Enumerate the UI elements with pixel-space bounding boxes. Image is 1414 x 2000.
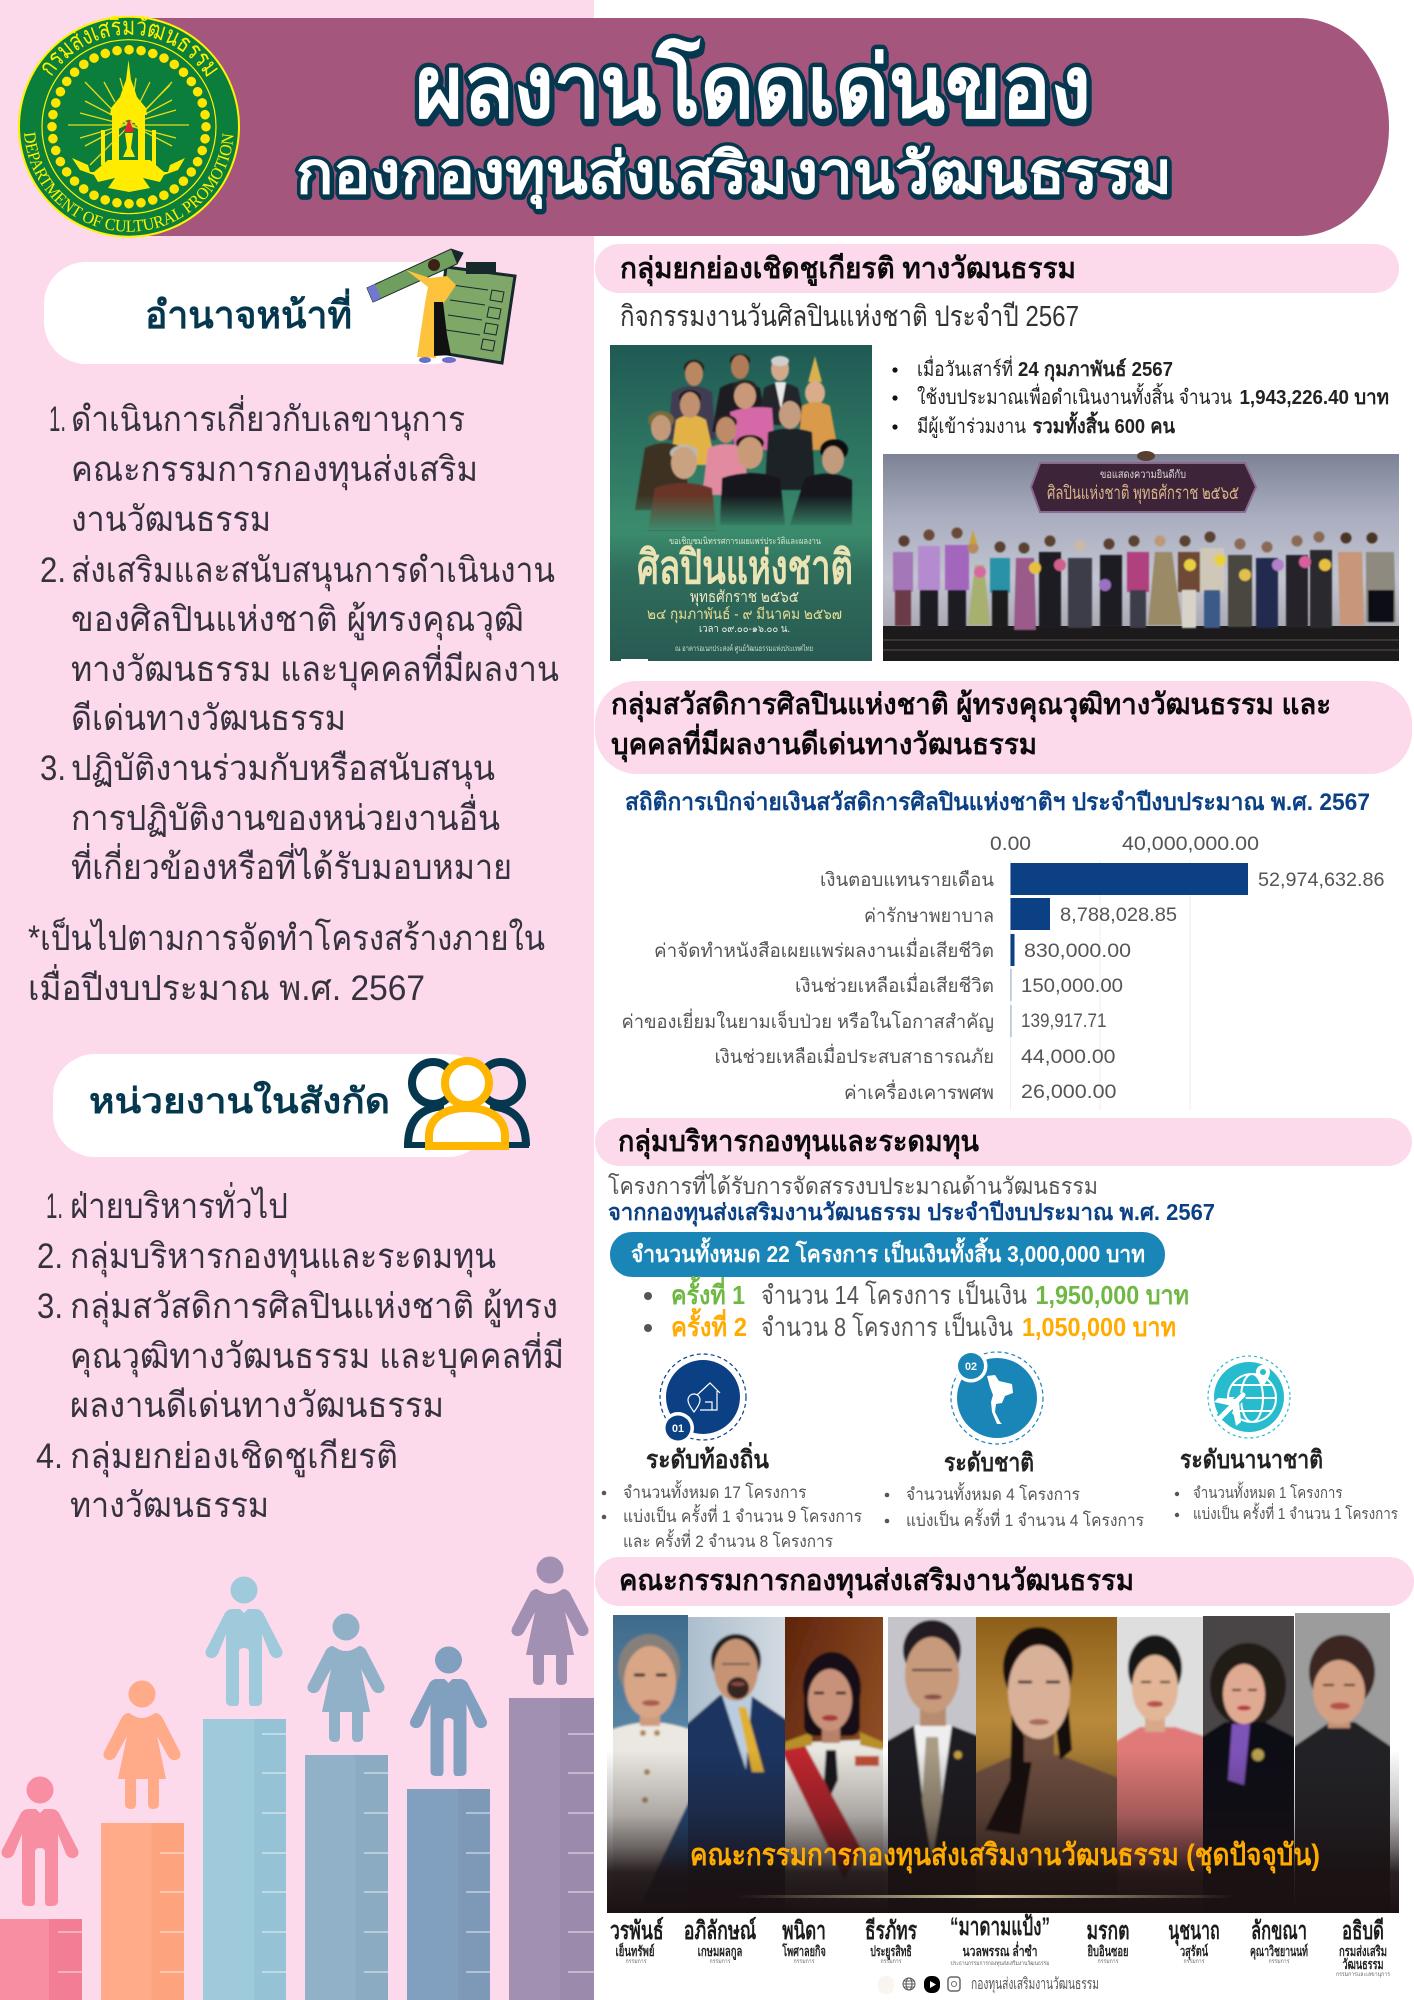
bullets: national: แบ่งเป็น ครั้งที่ 1 จำนวน 4 โครงการ [906,1508,1144,1530]
bar chart: welfare disbursement [622,834,1384,1110]
member names: นวลพรรณ ล่ำซำ [962,1941,1038,1959]
icon: instagram [948,1977,960,1991]
section heading: บุคคลที่มีผลงานดีเด่นทางวัฒนธรรม [611,723,1037,762]
member names: วสุรัตน์ [1180,1943,1208,1960]
duties list: การปฏิบัติงานของหน่วยงานอื่น [71,794,500,838]
heading pill: units: หน่วยงานในสังกัด [89,1080,390,1121]
portrait 1 [613,1615,688,1891]
duties list: ส่งเสริมและสนับสนุนการดำเนินงาน [71,551,555,591]
units list [36,1182,564,1525]
member names: กรมส่งเสริม [1339,1943,1387,1959]
intro text: จากกองทุนส่งเสริมงานวัฒนธรรม ประจำปีงบประมาณ พ.ศ. 2567 [608,1199,1215,1227]
bar chart: welfare disbursement: 52,974,632.86 [1258,870,1384,891]
bar chart: welfare disbursement: 44,000.00 [1021,1047,1116,1068]
title line 1: ผลงานโดดเด่นของ [415,37,1091,136]
icon: person with giant pencil and checklist [367,249,515,363]
panel: fund committee [595,1557,1414,1994]
duties list: 2. [40,551,66,590]
section heading [595,1118,1412,1166]
bar chart: welfare disbursement: 150,000.00 [1021,976,1123,997]
icon: map of Thailand: 02 [965,1361,977,1373]
units list: 2. [37,1237,63,1276]
overlay title: คณะกรรมการกองทุนส่งเสริมงานวัฒนธรรม (ชุดปัจจุบัน) [690,1839,1320,1874]
chart title: สถิติการเบิกจ่ายเงินสวัสดิการศิลปินแห่งชาติฯ ประจำปีงบประมาณ พ.ศ. 2567 [625,789,1370,816]
panel: powers and duties [28,249,559,1008]
left pink panel [0,0,594,2000]
panel: honor group [595,244,1399,661]
poster: national artists: ณ อาคารอเนกประสงค์ ศูนย์วัฒนธรรมแห่งประเทศไทย [675,643,813,654]
member names: กรรมการ [880,1958,902,1965]
bullets: event facts: 1,943,226.40 บาท [1240,387,1389,409]
bar chart: welfare disbursement: ค่าเครื่องเคารพศพ [844,1079,994,1104]
logo: Department of Cultural Promotion seal [18,16,240,238]
poster: national artists: เวลา ๐๙.๐๐-๑๖.๐๐ น. [699,624,790,635]
section heading: กลุ่มสวัสดิการศิลปินแห่งชาติ ผู้ทรงคุณวุฒิทางวัฒนธรรม และ [611,689,1331,722]
bullets: local: จำนวนทั้งหมด 17 โครงการ [623,1480,806,1502]
bar chart: welfare disbursement: เงินช่วยเหลือเมื่อเสียชีวิต [795,972,994,997]
units list: 3. [37,1287,63,1326]
member names: วัฒนธรรม [1342,1956,1384,1972]
section heading [595,681,1412,774]
bullets: event facts [892,355,1389,439]
panel: fund management group [595,1118,1412,1551]
bullets: event facts: ใช้งบประมาณเพื่อดำเนินงานทั้งสิ้น จำนวน [917,383,1232,409]
level: international: ระดับนานาชาติ [1180,1446,1323,1474]
icon: globe, plane and pin [1208,1356,1290,1438]
member names: กรรมการ [710,1958,731,1965]
member names: มรกต [1086,1917,1130,1945]
icon: youtube [924,1976,940,1993]
bar and figure 2 [101,1680,184,2000]
bullets: event facts: รวมทั้งสิ้น 600 คน [1032,411,1175,438]
bar and figure 3 [203,1576,286,2000]
fund page name: กองทุนส่งเสริมงานวัฒนธรรม [971,1976,1099,1994]
level: national: ระดับชาติ [944,1449,1034,1477]
section heading: กลุ่มบริหารกองทุนและระดมทุน [618,1126,979,1159]
total pill: จำนวนทั้งหมด 22 โครงการ เป็นเงินทั้งสิ้น 3,000,000 บาท [631,1237,1145,1267]
photo: national artists on stage: ศิลปินแห่งชาติ พุทธศักราช ๒๕๖๕ [1047,483,1239,505]
bullets: local: และ ครั้งที่ 2 จำนวน 8 โครงการ [623,1529,833,1551]
header banner [129,18,1389,236]
poster: national artists: พุทธศักราช ๒๕๖๕ [690,589,799,607]
member names: ธีรภัทร [865,1917,917,1945]
portrait 5 [976,1617,1117,1888]
bullets: national [885,1482,1144,1530]
panel: affiliated units [36,1054,564,1525]
bar and figure 4 [305,1614,388,2000]
bullets: national: จำนวนทั้งหมด 4 โครงการ [906,1482,1080,1504]
bar chart: welfare disbursement: 830,000.00 [1024,941,1131,962]
member names: โพศาลยกิจ [782,1942,826,1959]
level: local: ระดับท้องถิ่น [646,1442,769,1474]
photo: national artists on stage [883,451,1399,661]
bar chart: welfare disbursement: 8,788,028.85 [1060,905,1177,926]
heading pill: duties [44,262,474,364]
bar chart: welfare disbursement: เงินตอบแทนรายเดือน [820,870,994,891]
icon: house with map pin: 01 [672,1423,684,1435]
bar chart: welfare disbursement: เงินช่วยเหลือเมื่อประสบสาธารณภัย [714,1043,994,1068]
portrait 4 [888,1617,976,1892]
title line 2: กองกองทุนส่งเสริมงานวัฒนธรรม [296,141,1172,210]
bar chart: welfare disbursement: 0.00 [990,834,1031,855]
icon: facebook [878,1976,894,1994]
photo strip: committee members [605,1607,1399,1920]
member names: อธิบดี [1342,1917,1384,1945]
member names: กรรมการและเลขานุการ [1336,1971,1391,1978]
heading pill: units [53,1054,490,1157]
duties list: ดีเด่นทางวัฒนธรรม [71,699,346,738]
units list: 1. [46,1187,63,1226]
section heading: คณะกรรมการกองทุนส่งเสริมงานวัฒนธรรม [619,1565,1134,1598]
bar chart: welfare disbursement: ค่ารักษาพยาบาล [864,906,994,927]
bullets: international: จำนวนทั้งหมด 1 โครงการ [1193,1481,1342,1502]
member names: ประธานกรรมการกองทุนส่งเสริมงานวัฒนธรรม [950,1960,1050,1967]
portrait 2 [688,1617,785,1892]
section heading [595,1557,1414,1606]
intro text [608,1170,1215,1227]
activity subtitle: กิจกรรมงานวันศิลปินแห่งชาติ ประจำปี 2567 [620,301,1079,333]
bar and figure 1 [0,1776,82,2000]
member names: กรรมการ [1098,1958,1119,1965]
member names: วรพันธ์ [610,1916,664,1945]
icon: globe [903,1978,915,1990]
rounds list: ครั้งที่ 1 [671,1275,745,1310]
duties list: ที่เกี่ยวข้องหรือที่ได้รับมอบหมาย [71,843,512,887]
bullets: event facts: เมื่อวันเสาร์ที่ [917,355,1013,381]
units list: กลุ่มยกย่องเชิดชูเกียรติ [70,1437,398,1477]
bullets: local [602,1480,862,1551]
rounds list: จำนวน 14 โครงการ เป็นเงิน [761,1279,1027,1310]
portrait 8 [1295,1613,1390,1892]
rounds list: 1,050,000 บาท [1022,1312,1176,1342]
icon: people group [404,1061,529,1146]
member names: นุชนาถ [1168,1917,1220,1947]
units list: ฝ่ายบริหารทั่วไป [70,1182,288,1226]
poster: national artists: ๒๔ กุมภาพันธ์ - ๙ มีนาคม ๒๕๖๗ [647,606,842,624]
bar chart: welfare disbursement: ค่าของเยี่ยมในยามเจ็บป่วย หรือในโอกาสสำคัญ [622,1008,994,1033]
note: เมื่อปีงบประมาณ พ.ศ. 2567 [28,964,425,1008]
logo: Department of Cultural Promotion seal: กรมส่งเสริมวัฒนธรรม [42,16,218,77]
bar chart: welfare disbursement: 26,000.00 [1021,1082,1116,1103]
logo: Department of Cultural Promotion seal: DEPARTMENT OF CULTURAL PROMOTION [24,132,234,232]
member names: กรรมการ [1184,1958,1205,1965]
photo: national artists on stage: ขอแสดงความยินดีกับ [1100,468,1186,481]
bar chart: welfare disbursement: 40,000,000.00 [1122,834,1259,855]
member names [610,1913,1391,1978]
bullets: international [1175,1481,1398,1523]
units list: ผลงานดีเด่นทางวัฒนธรรม [70,1386,444,1425]
bar chart: welfare disbursement: ค่าจัดทำหนังสือเผยแพร่ผลงานเมื่อเสียชีวิต [654,937,994,962]
member names: กรรมการ [626,1958,647,1965]
bullets: event facts: มีผู้เข้าร่วมงาน [917,416,1026,439]
member names: พนิดา [782,1917,826,1945]
rounds list: 1,950,000 บาท [1036,1280,1189,1310]
duties list: 1. [49,400,66,439]
poster: national artists [610,345,872,661]
member names: เย็นทรัพย์ [616,1942,654,1959]
portrait 6 [1117,1617,1203,1878]
bar and figure 5 [407,1646,490,2000]
member names: กรรมการ [1268,1958,1290,1965]
rounds list: ครั้งที่ 2 [671,1307,747,1342]
bullets: event facts: 24 กุมภาพันธ์ 2567 [1018,358,1173,382]
duties list: คณะกรรมการกองทุนส่งเสริม [71,450,478,490]
units list: คุณวุฒิทางวัฒนธรรม และบุคคลที่มี [70,1332,564,1377]
level: international [1175,1356,1398,1523]
poster title: ศิลปินแห่งชาติ [637,541,853,593]
bar and figure 6 [509,1556,594,2000]
member names: อภิลักษณ์ [684,1916,756,1945]
units list: ทางวัฒนธรรม [70,1486,269,1525]
heading pill: duties: อำนาจหน้าที่ [145,288,352,337]
duties list [40,395,559,887]
duties list: ปฏิบัติงานร่วมกับหรือสนับสนุน [71,749,495,789]
units list: กลุ่มสวัสดิการศิลปินแห่งชาติ ผู้ทรง [70,1287,558,1327]
portrait 3 [785,1617,883,1877]
dark fade overlay [607,1750,1399,1913]
note: *เป็นไปตามการจัดทำโครงสร้างภายใน [28,917,545,958]
intro text: โครงการที่ได้รับการจัดสรรงบประมาณด้านวัฒนธรรม [608,1170,1098,1199]
level: local [602,1354,862,1551]
member names: ประยูรสิทธิ [870,1943,912,1960]
section heading [595,244,1399,293]
member names: คุณาวิชยานนท์ [1250,1943,1308,1960]
duties list: ของศิลปินแห่งชาติ ผู้ทรงคุณวุฒิ [71,600,524,640]
icon: house with map pin [660,1354,746,1444]
member names: กรรมการ [794,1958,815,1965]
illustration: people standing on rising bars [0,1556,594,2000]
duties list: 3. [40,749,66,788]
level: national [885,1350,1144,1530]
note [28,917,545,1008]
member names: ลักขณา [1251,1917,1307,1945]
bullets: local: แบ่งเป็น ครั้งที่ 1 จำนวน 9 โครงการ [623,1504,862,1526]
units list: กลุ่มบริหารกองทุนและระดมทุน [70,1237,496,1277]
rounds list [644,1275,1189,1342]
panel: welfare group [595,681,1412,1110]
member names: “มาดามแป้ง” [950,1913,1050,1941]
member names: ยิบอินซอย [1087,1943,1128,1959]
total pill [610,1232,1165,1277]
member names: เกษมผลกูล [698,1943,742,1960]
units list: 4. [36,1437,63,1476]
duties list: งานวัฒนธรรม [71,500,271,539]
icon: map of Thailand [951,1350,1043,1444]
duties list: ดำเนินการเกี่ยวกับเลขานุการ [71,395,465,440]
poster: national artists: ขอเชิญชมนิทรรศการเผยแพร่ประวัติและผลงาน [669,536,821,546]
section heading: กลุ่มยกย่องเชิดชูเกียรติ ทางวัฒนธรรม [620,253,1076,286]
duties list: ทางวัฒนธรรม และบุคคลที่มีผลงาน [71,645,559,690]
social media row [878,1976,1099,1994]
bar chart: welfare disbursement: 139,917.71 [1021,1011,1106,1032]
portrait 7 [1203,1616,1294,1894]
rounds list: จำนวน 8 โครงการ เป็นเงิน [761,1311,1013,1342]
